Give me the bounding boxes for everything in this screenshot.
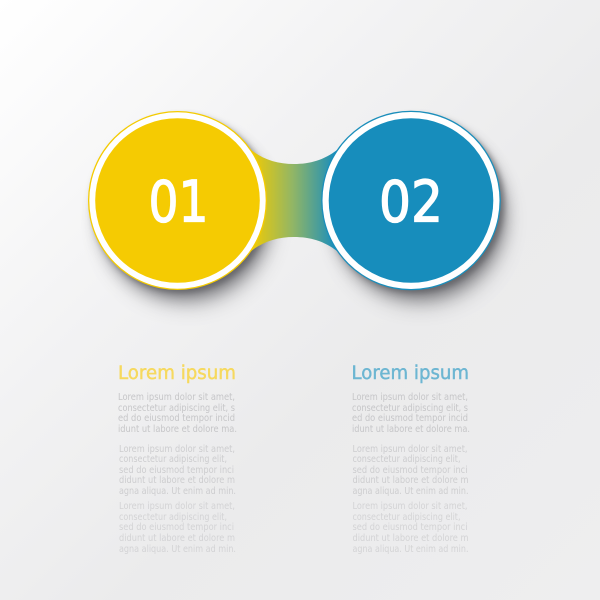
column 1 text bbox=[118, 363, 237, 555]
text block: column 2 paragraph 3: Lorem ipsum dolor sit amet, bbox=[352, 501, 468, 512]
circle 02 bbox=[321, 111, 501, 290]
drop shadow: yellow circle bbox=[92, 115, 271, 304]
text block: column 1 paragraph 3: agna aliqua. Ut enim ad min. bbox=[119, 544, 236, 555]
text block: column 1 paragraph 3 bbox=[119, 501, 236, 555]
text block: column 2 paragraph 2 bbox=[352, 444, 468, 497]
text block: column 2 paragraph 2: Lorem ipsum dolor sit amet, bbox=[352, 444, 468, 455]
text block: column 2 paragraph 1: ed do eiusmod tempor incid bbox=[352, 413, 468, 424]
text block: column 1 paragraph 2: didunt ut labore et dolore m bbox=[119, 475, 235, 486]
text block: column 1 paragraph 2: Lorem ipsum dolor sit amet, bbox=[119, 444, 235, 455]
text block: column 2 paragraph 1: Lorem ipsum dolor sit amet, bbox=[352, 392, 468, 403]
text block: column 2 paragraph 3 bbox=[352, 501, 468, 555]
text block: column 1 paragraph 2 bbox=[119, 444, 236, 497]
text block: column 1 paragraph 3: Lorem ipsum dolor sit amet, bbox=[119, 501, 235, 512]
column 2 text bbox=[352, 363, 470, 555]
text block: column 1 paragraph 2: agna aliqua. Ut enim ad min. bbox=[119, 486, 236, 497]
number 01: 01 bbox=[148, 170, 208, 236]
text block: column 2 paragraph 1 bbox=[352, 392, 470, 435]
heading: column 1: Lorem ipsum bbox=[118, 363, 236, 384]
text block: column 1 paragraph 1: idunt ut labore et dolore ma. bbox=[118, 424, 237, 435]
text block: column 1 paragraph 3: sed do eiusmod tempor inci bbox=[119, 522, 234, 533]
text block: column 2 paragraph 3: agna aliqua. Ut enim ad min. bbox=[352, 544, 468, 555]
text block: column 2 paragraph 3: didunt ut labore et dolore m bbox=[352, 533, 468, 544]
text block: column 1 paragraph 1 bbox=[118, 392, 237, 435]
text block: column 2 paragraph 3: consectetur adipiscing elit, bbox=[352, 512, 461, 523]
text block: column 1 paragraph 2: consectetur adipiscing elit, bbox=[119, 454, 227, 465]
circle 01 bbox=[88, 111, 267, 290]
text block: column 1 paragraph 1: Lorem ipsum dolor sit amet, bbox=[118, 392, 235, 403]
text block: column 2 paragraph 1: idunt ut labore et dolore ma. bbox=[352, 424, 470, 435]
text block: column 2 paragraph 2: didunt ut labore et dolore m bbox=[352, 475, 468, 486]
text block: column 2 paragraph 2: agna aliqua. Ut enim ad min. bbox=[352, 486, 468, 497]
text block: column 1 paragraph 2: sed do eiusmod tempor inci bbox=[119, 465, 234, 476]
text block: column 2 paragraph 1: consectetur adipiscing elit, s bbox=[352, 403, 468, 414]
drop shadow: blue circle bbox=[326, 115, 505, 304]
text block: column 1 paragraph 3: didunt ut labore et dolore m bbox=[119, 533, 235, 544]
text block: column 1 paragraph 1: ed do eiusmod tempor incid bbox=[118, 413, 235, 424]
text block: column 2 paragraph 3: sed do eiusmod tempor inci bbox=[352, 522, 468, 533]
text block: column 1 paragraph 3: consectetur adipiscing elit, bbox=[119, 512, 227, 523]
heading: column 2: Lorem ipsum bbox=[352, 363, 469, 384]
connector band bbox=[250, 149, 337, 252]
number 02: 02 bbox=[379, 170, 443, 236]
text block: column 2 paragraph 2: sed do eiusmod tempor inci bbox=[352, 465, 468, 476]
text block: column 2 paragraph 2: consectetur adipiscing elit, bbox=[352, 454, 461, 465]
text block: column 1 paragraph 1: consectetur adipiscing elit, s bbox=[118, 403, 235, 414]
